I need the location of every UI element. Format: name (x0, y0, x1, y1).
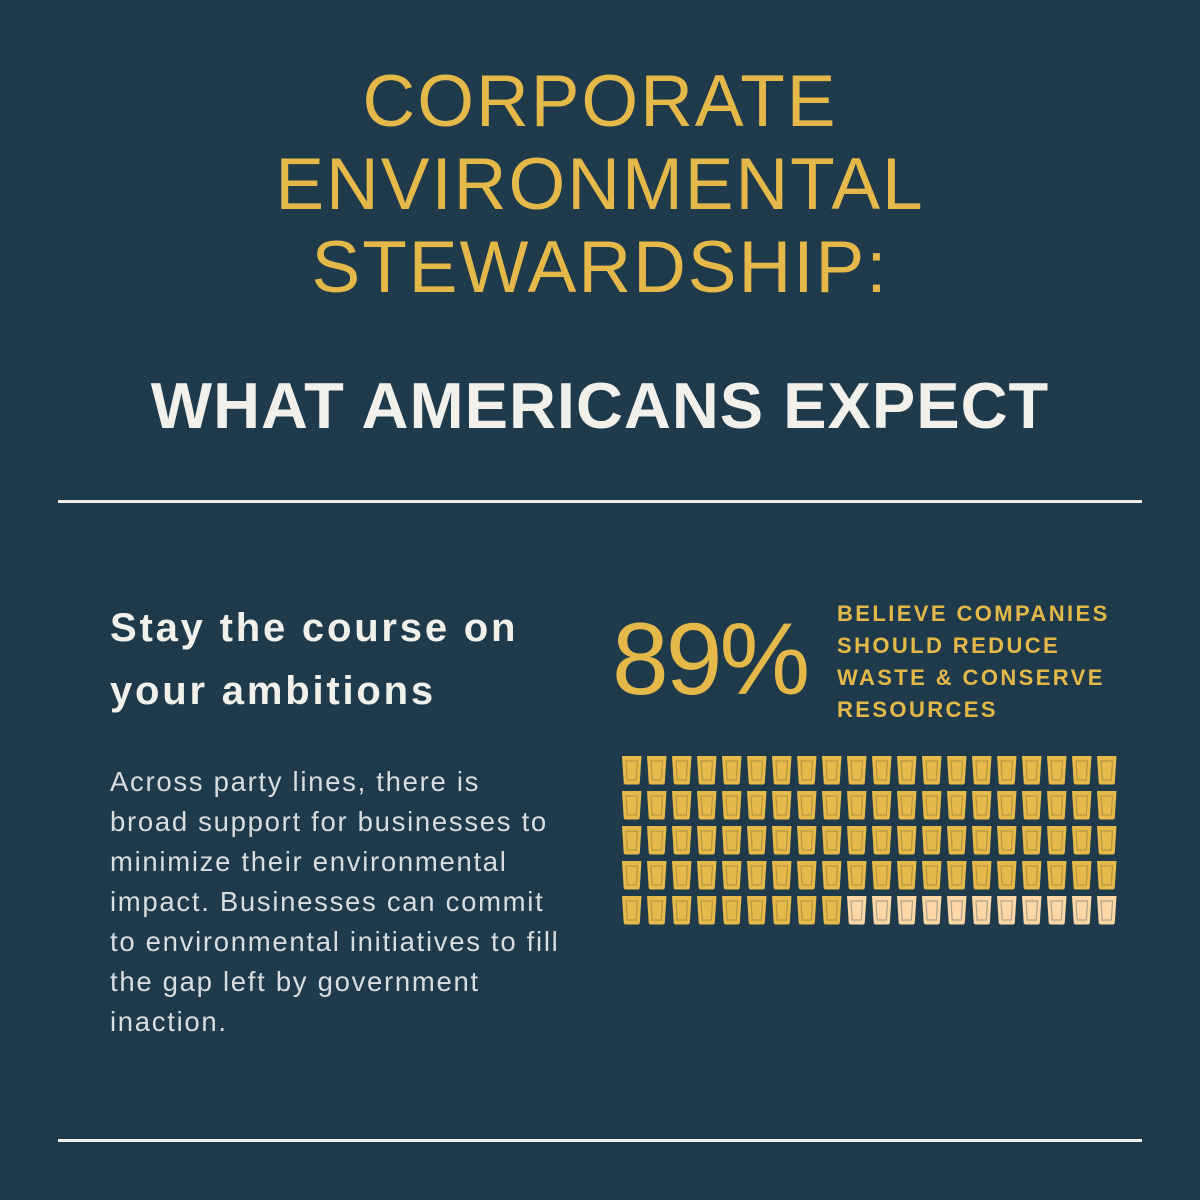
body text: inaction. (110, 1006, 228, 1037)
body text: the gap left by government (110, 966, 480, 997)
title (275, 61, 925, 308)
stat: 89%: 89% (612, 602, 807, 716)
title: STEWARDSHIP: (312, 227, 888, 308)
heading: stay the course (110, 606, 518, 713)
title: ENVIRONMENTAL (275, 144, 925, 225)
body text: impact. Businesses can commit (110, 886, 544, 917)
body text: minimize their environmental (110, 846, 508, 877)
stat caption (837, 601, 1110, 722)
title: CORPORATE (363, 61, 837, 142)
subtitle: WHAT AMERICANS EXPECT (151, 369, 1049, 442)
stat caption: WASTE & CONSERVE (837, 665, 1105, 690)
body text (110, 766, 559, 1037)
heading: stay the course: your ambitions (110, 669, 436, 713)
body text: to environmental initiatives to fill (110, 926, 559, 957)
body text: Across party lines, there is (110, 766, 480, 797)
stat caption: BELIEVE COMPANIES (837, 601, 1110, 626)
body text: broad support for businesses to (110, 806, 548, 837)
stat caption: SHOULD REDUCE (837, 633, 1060, 658)
stat caption: RESOURCES (837, 697, 998, 722)
icon grid: 89 of 100 cups (622, 756, 1116, 924)
heading: stay the course: Stay the course on (110, 606, 518, 650)
